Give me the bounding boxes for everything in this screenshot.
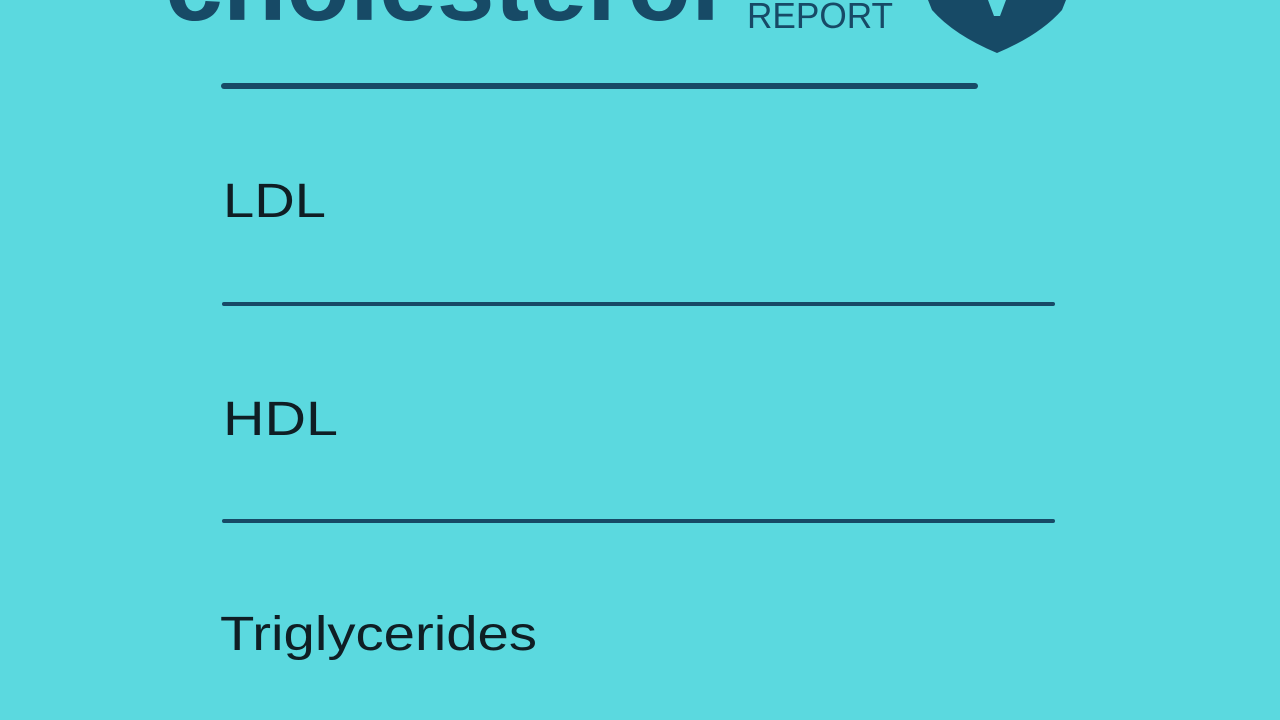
divider top xyxy=(221,83,978,89)
divider 2 xyxy=(222,302,1055,306)
label: Triglycerides: Triglycerides xyxy=(220,608,537,661)
label: HDL: HDL xyxy=(223,393,338,446)
icon: shield xyxy=(928,0,1066,53)
divider 3 xyxy=(222,519,1055,523)
label: LDL: LDL xyxy=(223,175,326,228)
